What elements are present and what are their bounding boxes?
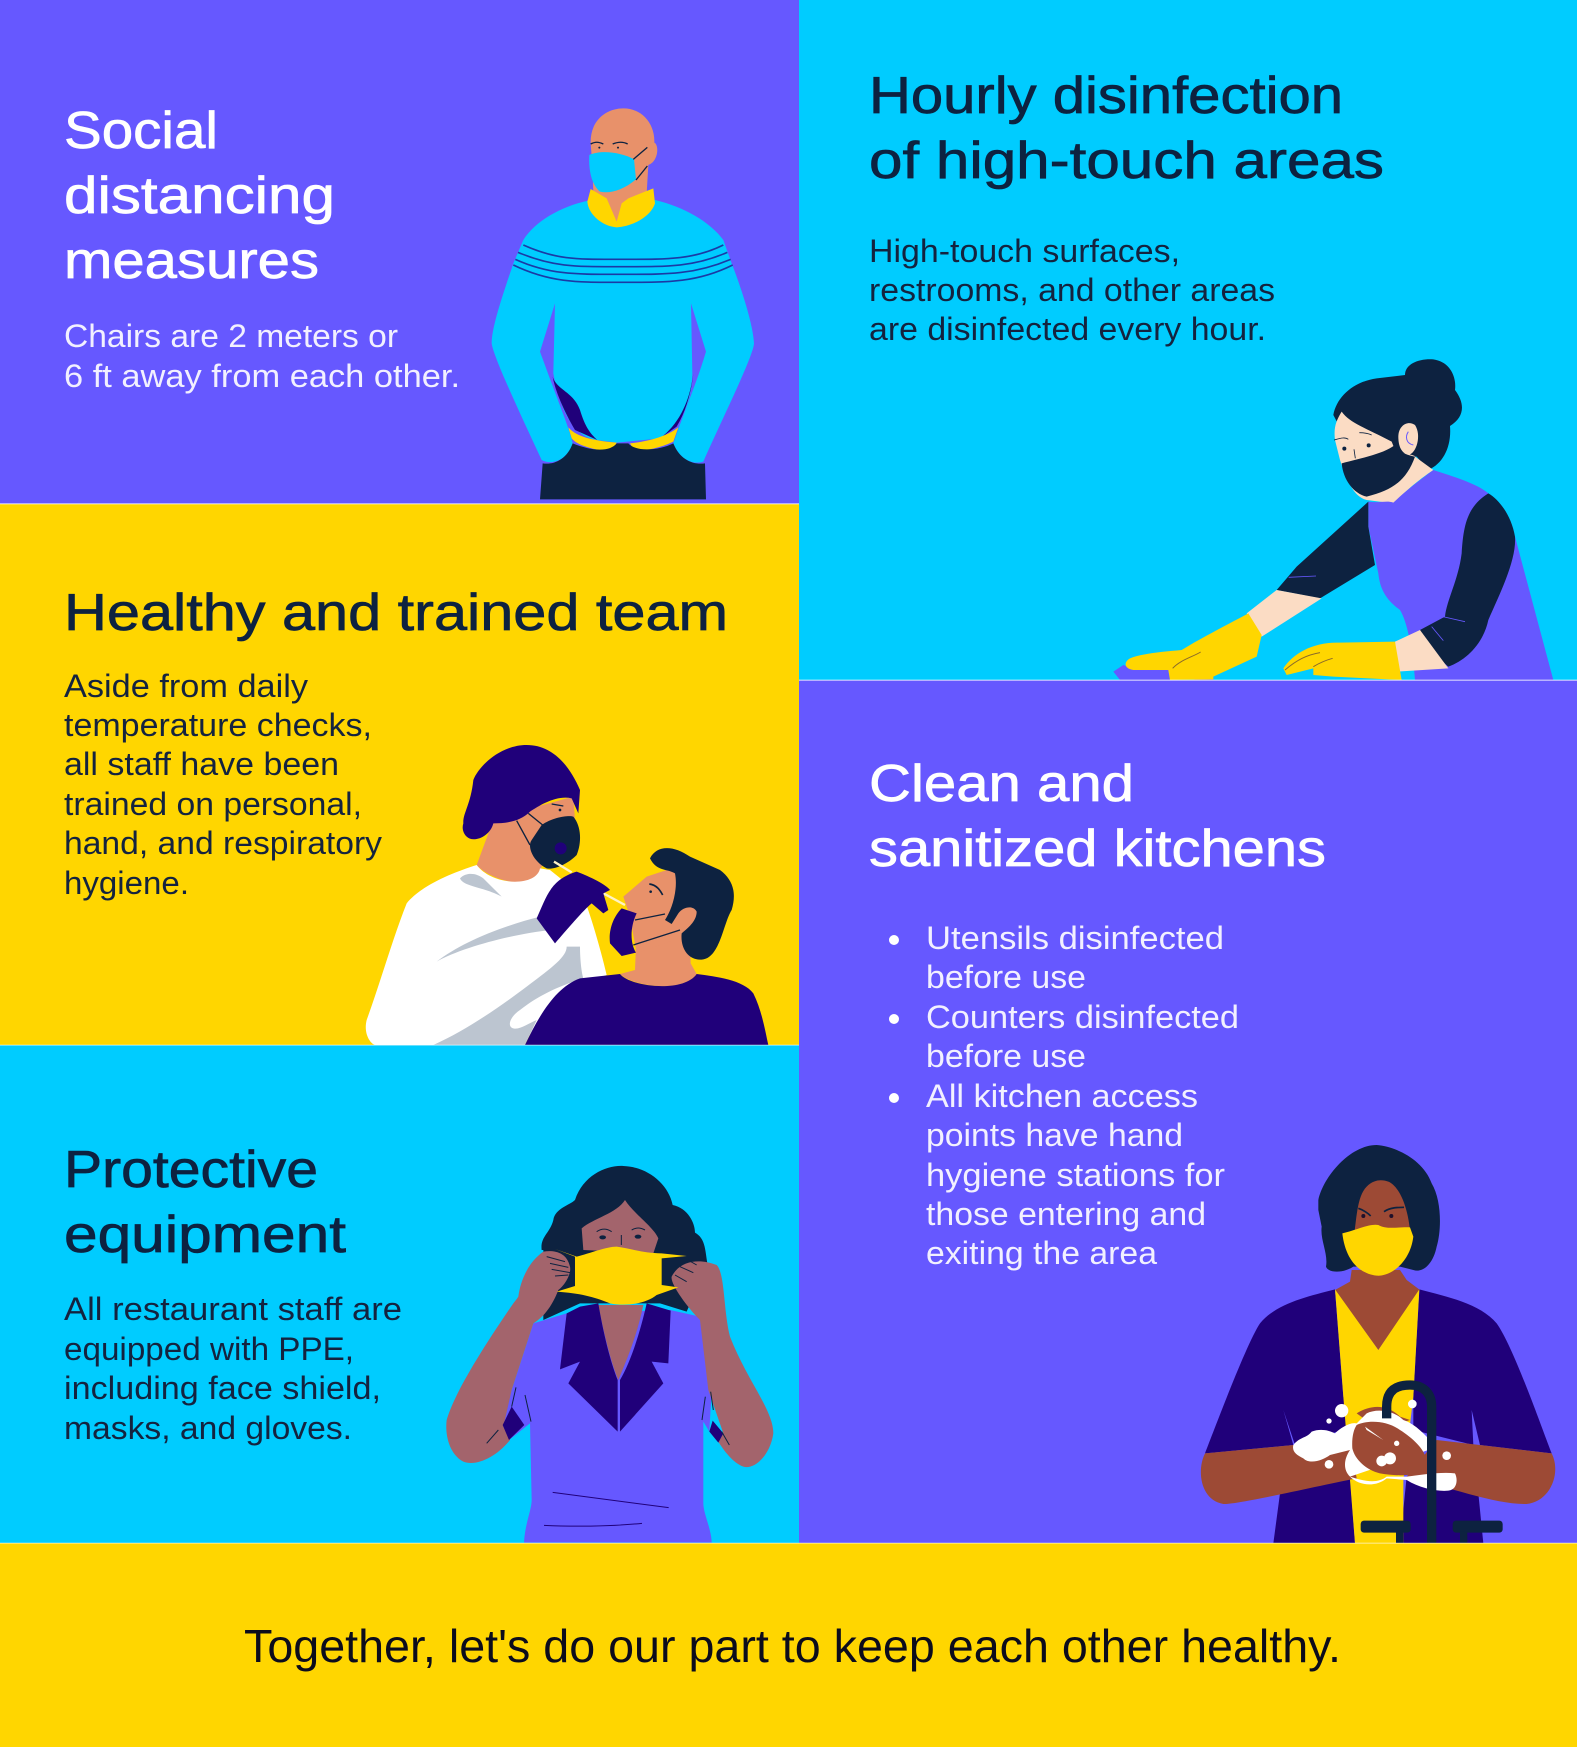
heading: clean and sanitized kitchens: sanitized kitchens	[869, 820, 1326, 878]
panel: clean and sanitized kitchens	[799, 680, 1577, 1543]
text: healthy team body: hygiene.	[64, 865, 189, 901]
text: protective equipment body: including face shield,	[64, 1370, 381, 1406]
illustration: woman washing hands	[1201, 1145, 1555, 1543]
text: healthy team body: hand, and respiratory	[64, 825, 382, 861]
list: kitchen measures: those entering and	[926, 1196, 1206, 1232]
heading: social distancing measures: distancing	[64, 167, 335, 225]
list: kitchen measures: Counters disinfected	[926, 999, 1239, 1035]
list: kitchen measures: Utensils disinfected	[926, 920, 1224, 956]
heading: hourly disinfection: Hourly disinfection	[869, 67, 1343, 125]
heading: protective equipment: Protective	[64, 1141, 318, 1199]
heading: social distancing measures: measures	[64, 232, 319, 290]
text: healthy team body	[64, 668, 382, 901]
text: hourly disinfection body: High-touch surfaces,	[869, 233, 1180, 269]
text: social distancing body	[64, 318, 460, 394]
illustration: man in blue sweater with mask	[492, 108, 754, 499]
text: healthy team body: temperature checks,	[64, 707, 372, 743]
heading: clean and sanitized kitchens: Clean and	[869, 755, 1134, 813]
list: kitchen measures: hygiene stations for	[926, 1157, 1225, 1193]
text: closing message: Together, let's do our part to keep each other healthy.	[244, 1620, 1341, 1672]
text: protective equipment body: masks, and gloves.	[64, 1410, 352, 1446]
text: healthy team body: all staff have been	[64, 746, 339, 782]
heading: protective equipment	[64, 1141, 347, 1264]
heading: social distancing measures: Social	[64, 102, 218, 160]
text: social distancing body: 6 ft away from each other.	[64, 358, 460, 394]
heading: social distancing measures	[64, 102, 335, 290]
text: healthy team body: trained on personal,	[64, 786, 362, 822]
heading: hourly disinfection: of high-touch areas	[869, 132, 1384, 190]
text: hourly disinfection body: are disinfected every hour.	[869, 311, 1266, 347]
panel: protective equipment	[0, 1045, 799, 1543]
list: kitchen measures: points have hand	[926, 1117, 1183, 1153]
text: protective equipment body	[64, 1291, 402, 1446]
text: hourly disinfection body: restrooms, and other areas	[869, 272, 1275, 308]
text: protective equipment body: equipped with PPE,	[64, 1331, 354, 1367]
heading: protective equipment: equipment	[64, 1206, 347, 1264]
list: kitchen measures: All kitchen access	[926, 1078, 1198, 1114]
illustration: woman putting on mask	[446, 1166, 773, 1543]
text: healthy team body: Aside from daily	[64, 668, 308, 704]
heading: hourly disinfection	[869, 67, 1384, 190]
illustration: medical swab test	[366, 745, 768, 1045]
text: social distancing body: Chairs are 2 meters or	[64, 318, 398, 354]
panel: healthy and trained team	[0, 504, 799, 1045]
text: protective equipment body: All restaurant staff are	[64, 1291, 402, 1327]
heading: clean and sanitized kitchens	[869, 755, 1326, 878]
illustration: woman cleaning a surface	[1113, 359, 1553, 680]
heading: healthy and trained team: Healthy and trained team	[64, 584, 728, 642]
list: kitchen measures: before use	[926, 959, 1086, 995]
panel: social distancing	[0, 0, 799, 504]
list: kitchen measures: exiting the area	[926, 1235, 1157, 1271]
panel: hourly disinfection	[799, 0, 1577, 680]
panel: closing message	[0, 1543, 1577, 1747]
list: kitchen measures	[889, 920, 1239, 1271]
text: hourly disinfection body	[869, 233, 1275, 347]
list: kitchen measures: before use	[926, 1038, 1086, 1074]
